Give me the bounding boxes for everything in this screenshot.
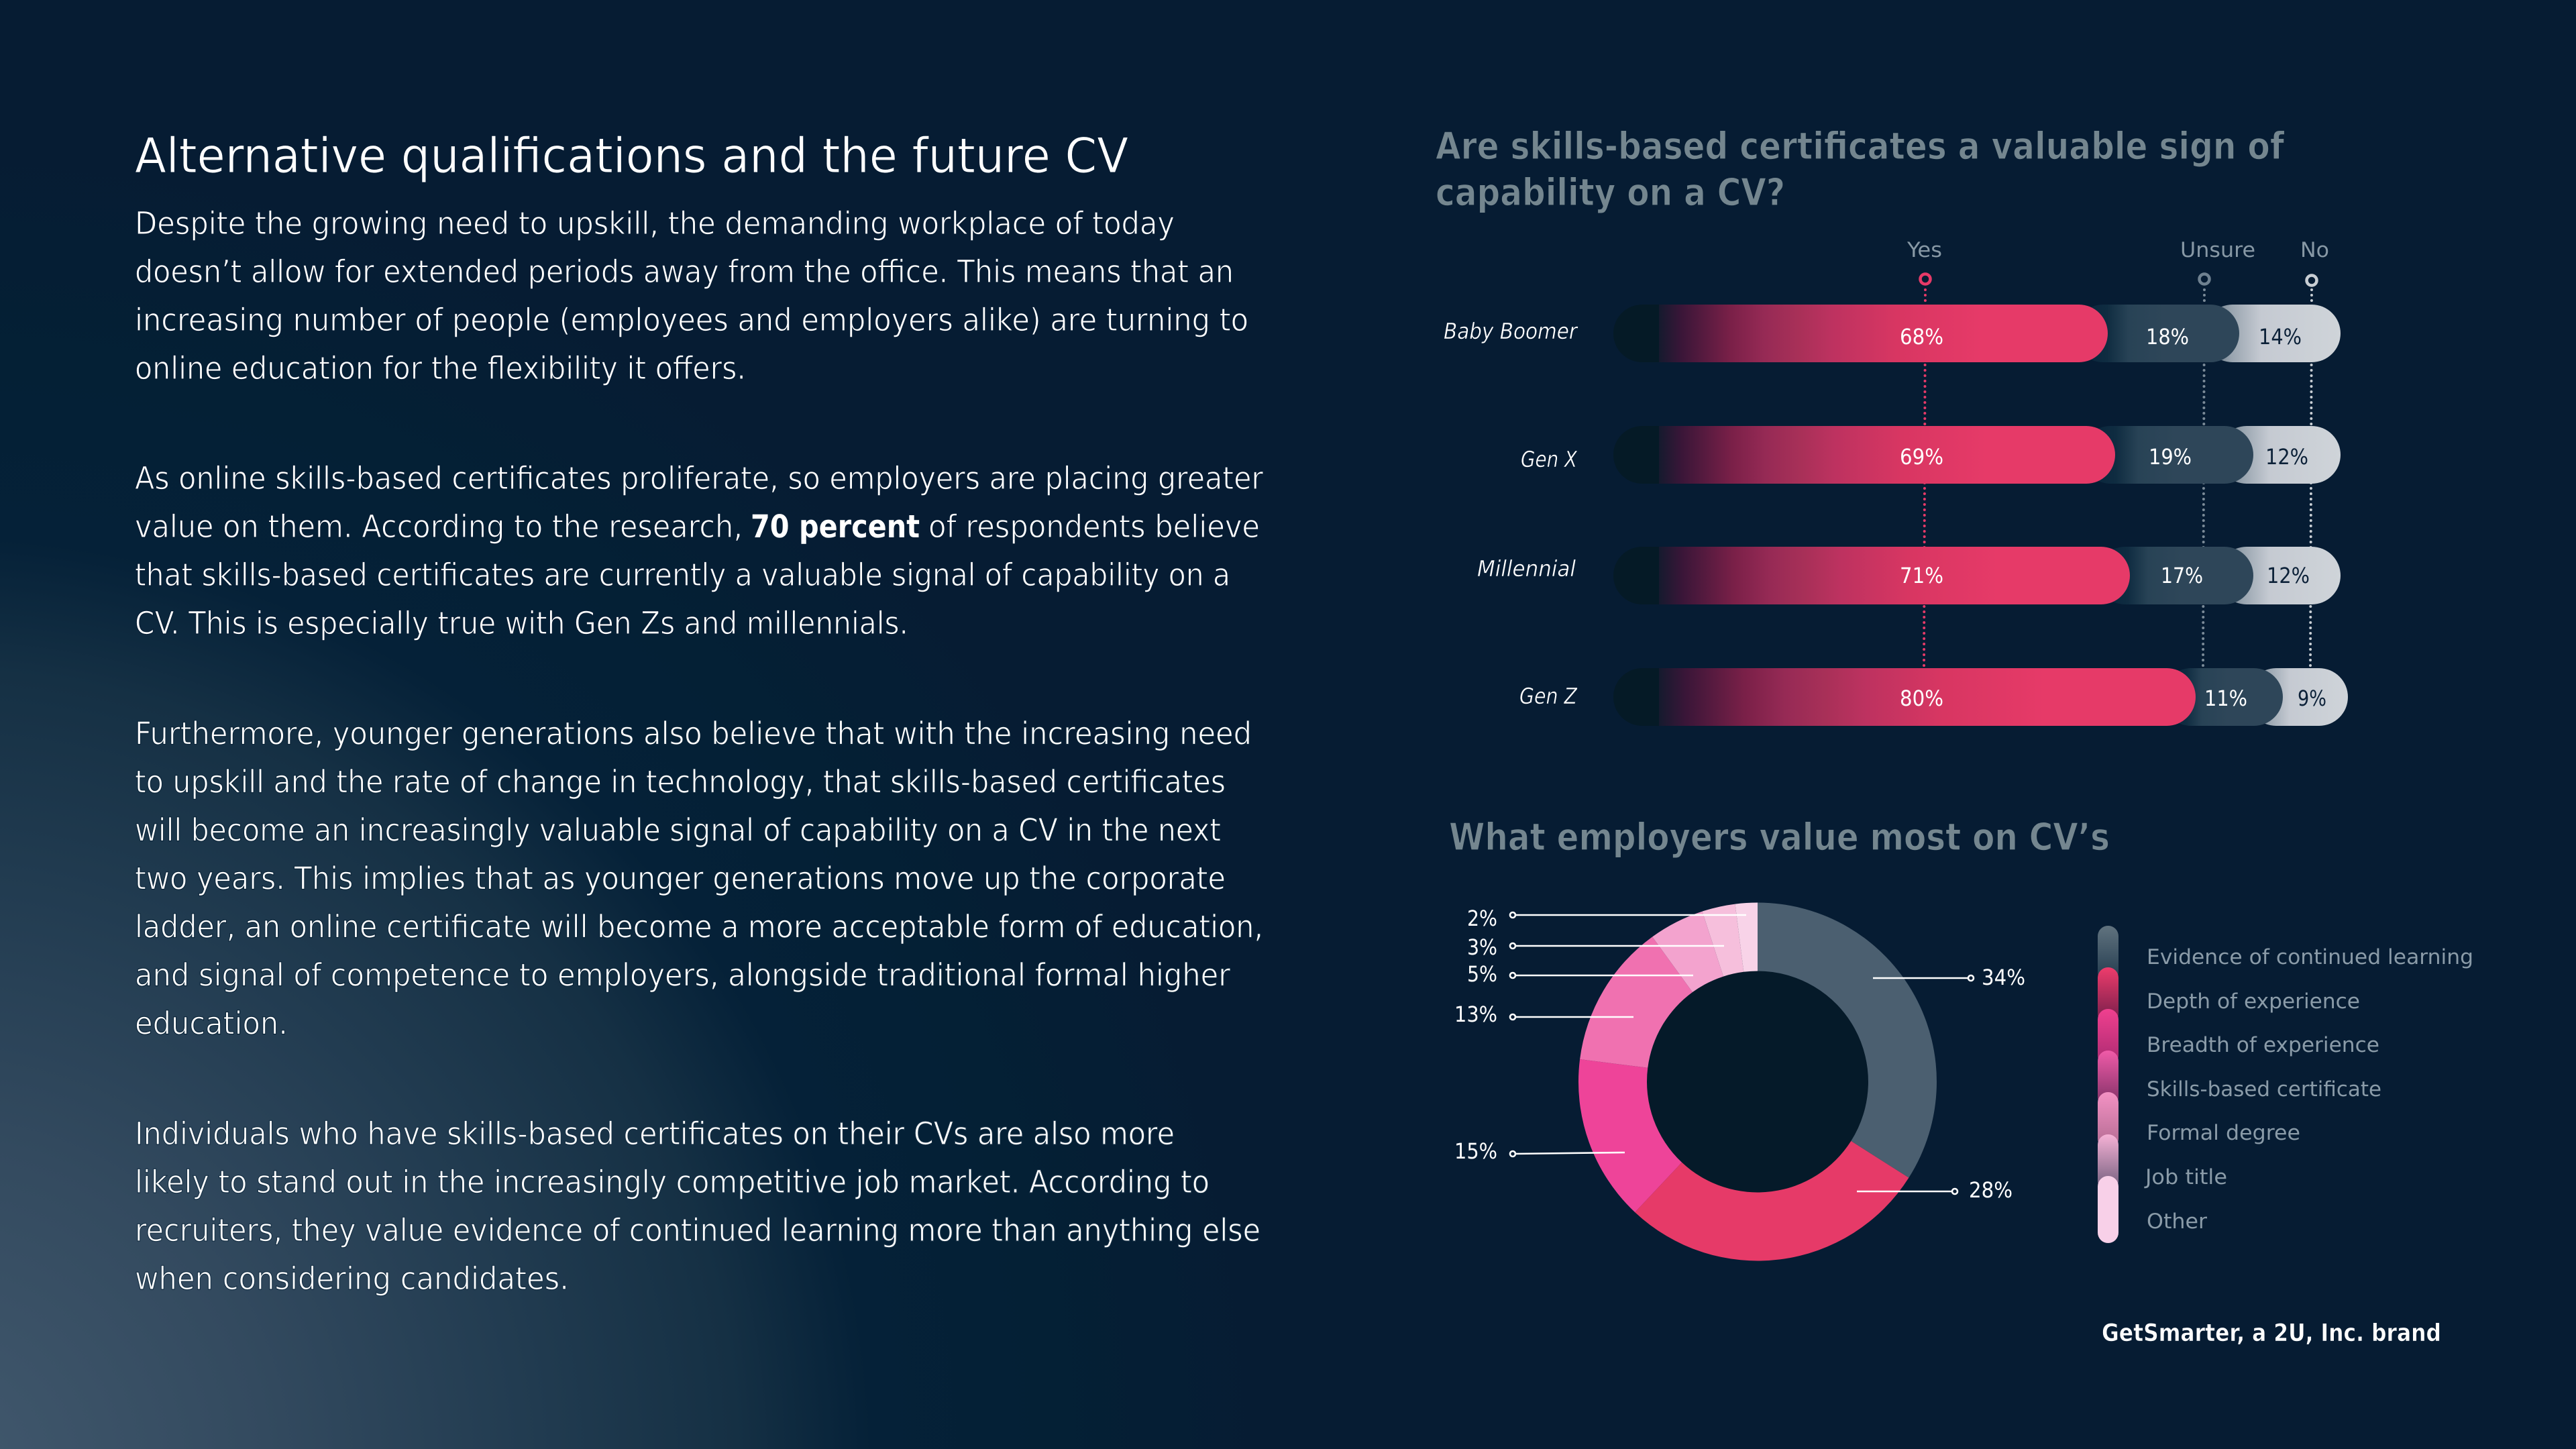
text block: paragraph 4: when considering candidates. — [135, 1260, 569, 1297]
heading: bar chart question: capability on a CV? — [1436, 171, 1785, 215]
heading: bar chart question — [1436, 125, 2285, 215]
row: Millennial — [1477, 547, 2341, 604]
legend labels: Breadth of experience — [2147, 1033, 2379, 1057]
row: Baby Boomer: Baby Boomer — [1444, 318, 1578, 344]
percentage labels: 13% — [1454, 1002, 1497, 1027]
text block: paragraph 2: 70 percent — [751, 508, 920, 545]
row: Baby Boomer: 14% — [2259, 324, 2302, 350]
row: Gen Z: Gen Z — [1519, 683, 1578, 709]
row: Gen Z: 9% — [2298, 686, 2326, 711]
source credit: GetSmarter, a 2U, Inc. brand — [2102, 1320, 2441, 1347]
donut chart — [1578, 903, 1937, 1260]
slice: 2% other — [1735, 903, 1758, 972]
legend labels — [2144, 945, 2473, 1234]
row: Baby Boomer: 68% — [1900, 324, 1943, 350]
legend labels: Skills-based certificate — [2147, 1077, 2381, 1102]
text block: paragraph 1 — [135, 205, 1248, 387]
percentage labels: 34% — [1982, 965, 2025, 990]
text block: paragraph 2: that skills-based certificates are currently a valuable signal of capability on a — [135, 557, 1230, 594]
text block: paragraph 3: Furthermore, younger generations also believe that with the increasing need — [135, 715, 1252, 753]
text block: paragraph 2: of respondents believe — [928, 508, 1260, 545]
row: Millennial: Millennial — [1477, 555, 1576, 582]
text block: paragraph 3: to upskill and the rate of change in technology, that skills-based certificates — [135, 763, 1226, 801]
text block: paragraph 3 — [135, 715, 1263, 1042]
percentage labels: 2% — [1467, 906, 1497, 931]
legend markers: Yes, Unsure, No: Unsure — [2180, 238, 2255, 262]
legend color bar — [2098, 926, 2118, 1243]
legend labels: Job title — [2144, 1165, 2227, 1189]
row: Gen X: 19% — [2149, 444, 2192, 470]
text block: paragraph 4: Individuals who have skills-based certificates on their CVs are also more — [135, 1116, 1175, 1152]
heading: bar chart question: Are skills-based certificates a valuable sign of — [1436, 125, 2285, 168]
row: Gen X — [1521, 426, 2341, 484]
row: Baby Boomer — [1444, 305, 2341, 362]
text block: paragraph 3: ladder, an online certificate will become a more acceptable form of education, — [135, 908, 1263, 946]
slice: 5% formal degree — [1652, 912, 1723, 992]
slice: 15% breadth of experience — [1578, 1059, 1682, 1212]
slice: 3% job title — [1703, 904, 1743, 977]
bar chart — [1444, 238, 2348, 726]
slice: 34% evidence of continued learning — [1758, 903, 1937, 1178]
donut leader lines — [1510, 912, 1974, 1194]
text block: paragraph 1: Despite the growing need to upskill, the demanding workplace of today — [135, 205, 1175, 242]
text block: paragraph 4 — [135, 1116, 1260, 1297]
row: Millennial: 17% — [2161, 563, 2203, 588]
legend labels: Formal degree — [2147, 1121, 2300, 1145]
row: Gen X: 12% — [2265, 444, 2308, 470]
percentage labels: 28% — [1969, 1177, 2012, 1203]
percentage labels — [1454, 906, 2025, 1203]
row: Millennial: 71% — [1900, 563, 1943, 588]
legend markers: Yes, Unsure, No — [1907, 238, 2329, 668]
title: Alternative qualifications and the future CV — [135, 127, 1128, 184]
row: Gen Z: 80% — [1900, 686, 1943, 711]
text block: paragraph 2: value on them. According to the research, — [135, 508, 743, 545]
legend markers: Yes, Unsure, No: Yes — [1907, 238, 1942, 262]
legend markers: Yes, Unsure, No: No — [2300, 238, 2329, 262]
heading: donut chart: What employers value most on CV’s — [1449, 816, 2110, 859]
percentage labels: 3% — [1467, 934, 1497, 960]
text block: paragraph 3: two years. This implies that as younger generations move up the corporate — [135, 860, 1226, 898]
legend labels: Depth of experience — [2147, 989, 2360, 1014]
text block: paragraph 2 — [135, 460, 1264, 642]
row: Gen X: Gen X — [1521, 446, 1578, 472]
slice: 13% skills-based certificate — [1580, 936, 1693, 1068]
row: Gen X: 69% — [1900, 444, 1943, 470]
text block: paragraph 1: online education for the flexibility it offers. — [135, 350, 746, 387]
text block: paragraph 2: As online skills-based certificates proliferate, so employers are placing greater — [135, 460, 1264, 497]
text block: paragraph 2: CV. This is especially true with Gen Zs and millennials. — [135, 605, 908, 642]
text block: paragraph 4: likely to stand out in the increasingly competitive job market. According to — [135, 1164, 1210, 1201]
percentage labels: 15% — [1454, 1138, 1497, 1164]
text block: paragraph 3: will become an increasingly valuable signal of capability on a CV in the next — [135, 812, 1221, 849]
slice: 28% depth of experience — [1635, 1141, 1909, 1260]
row: Gen Z: 11% — [2204, 686, 2247, 711]
text block: paragraph 4: recruiters, they value evidence of continued learning more than anything else — [135, 1212, 1260, 1249]
legend labels: Other — [2147, 1210, 2207, 1234]
percentage labels: 5% — [1467, 961, 1497, 987]
row: Gen Z — [1519, 668, 2348, 726]
row: Millennial: 12% — [2267, 563, 2310, 588]
text block: paragraph 3: education. — [135, 1005, 288, 1042]
text block: paragraph 1: increasing number of people (employees and employers alike) are turning to — [135, 302, 1248, 339]
text block: paragraph 1: doesn’t allow for extended periods away from the office. This means that an — [135, 254, 1234, 290]
row: Baby Boomer: 18% — [2146, 324, 2189, 350]
legend labels: Evidence of continued learning — [2147, 945, 2473, 969]
text block: paragraph 3: and signal of competence to employers, alongside traditional formal higher — [135, 957, 1231, 994]
